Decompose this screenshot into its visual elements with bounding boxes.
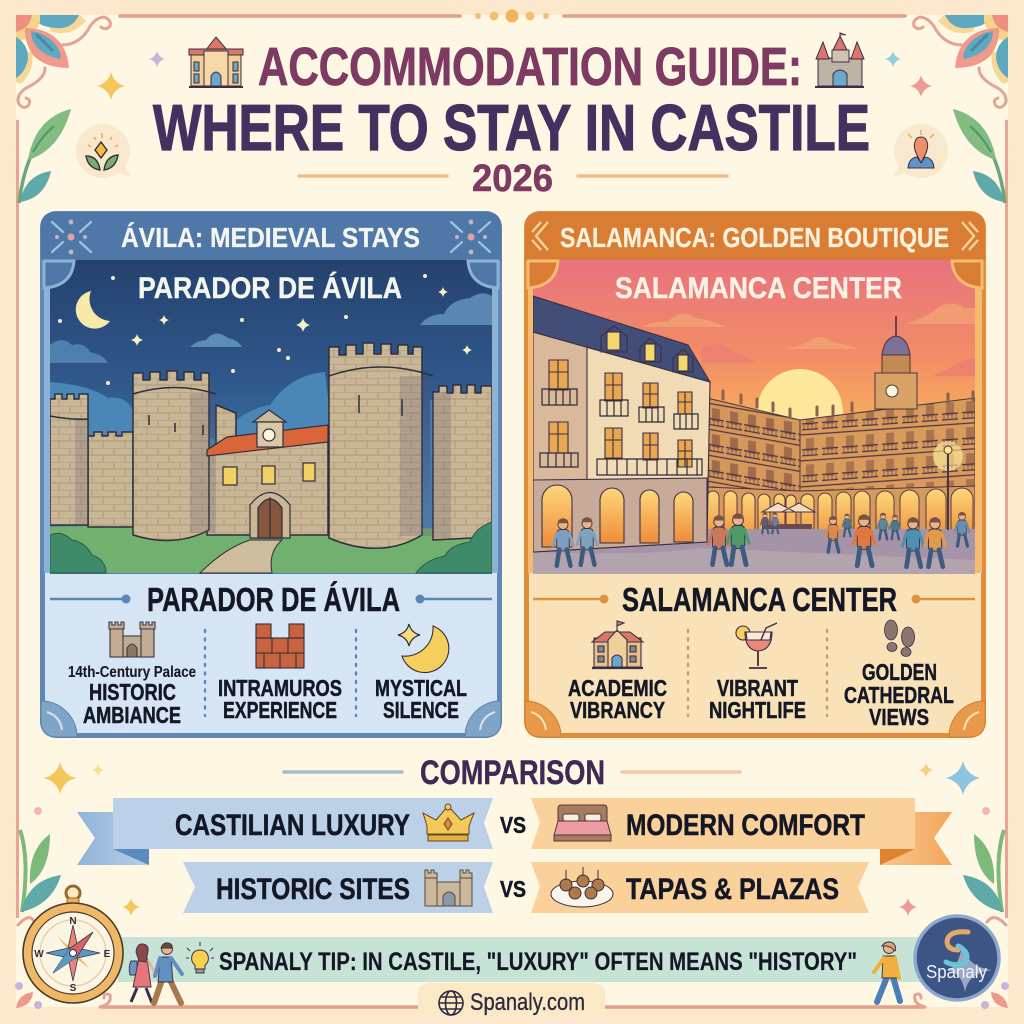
- title icon: hotel building: [189, 37, 243, 87]
- balconies: [540, 389, 702, 475]
- icon: cocktail: [736, 623, 777, 668]
- corner ornament: top left flower: [16, 15, 110, 107]
- dotted dividers: [205, 630, 356, 716]
- feature: intramuros experience: INTRAMUROS: [218, 675, 342, 701]
- vs label 2: VS: [500, 876, 526, 902]
- icon: crown: [423, 804, 474, 841]
- leaves: lower right: [963, 830, 1004, 912]
- feature: historic ambiance: HISTORIC: [89, 679, 176, 705]
- feature: vibrant nightlife: VIBRANT: [717, 675, 798, 701]
- panel: salamanca: [524, 211, 986, 738]
- image corner ornaments: avila: [44, 261, 498, 288]
- ribbon row 1 left: castilian luxury: CASTILIAN LUXURY: [175, 809, 410, 842]
- walkers: couple: [129, 943, 182, 1003]
- icon: footprints: [884, 620, 914, 656]
- feature: historic ambiance: 14th-Century Palace: [68, 664, 196, 681]
- ribbon row 2 right: tapas and plazas: [531, 862, 869, 913]
- feature: golden cathedral views: [844, 620, 954, 730]
- ribbon row 2 right: tapas and plazas: TAPAS & PLAZAS: [626, 873, 839, 906]
- people: [553, 512, 969, 567]
- roofline statues: [723, 391, 973, 417]
- panel: avila: [40, 211, 502, 738]
- title icon: castle: [815, 33, 864, 87]
- feature: mystical silence: SILENCE: [383, 697, 459, 723]
- compass: S: [70, 983, 77, 994]
- feature: academic vibrancy: ACADEMIC: [568, 675, 667, 701]
- path: [200, 540, 282, 573]
- feature: golden cathedral views: VIEWS: [869, 704, 929, 730]
- logo: spanaly: Spanaly: [926, 962, 987, 982]
- ribbon row 1 right: modern comfort: MODERN COMFORT: [626, 809, 865, 842]
- year rules: [299, 174, 727, 178]
- corner ornaments: avila lower: [41, 701, 501, 737]
- ribbon row 1 left: castilian luxury: [77, 798, 493, 865]
- leaves: lower left: [20, 830, 61, 912]
- feature: intramuros experience: [218, 624, 342, 723]
- sun: [757, 369, 843, 420]
- tip banner: SPANALY TIP: IN CASTILE, "LUXURY" OFTEN MEANS "HISTORY": [219, 948, 857, 976]
- feature: academic vibrancy: VIBRANCY: [570, 697, 665, 723]
- feature: historic ambiance: [68, 622, 196, 728]
- ground: [539, 529, 975, 560]
- speech bubble icon: lotus: [76, 124, 131, 178]
- lower title: salamanca: SALAMANCA CENTER: [622, 581, 897, 618]
- tower shading: [75, 376, 451, 538]
- icon: castle: [109, 622, 155, 657]
- feature: golden cathedral views: CATHEDRAL: [844, 682, 954, 708]
- image title: salamanca: SALAMANCA CENTER: [615, 272, 902, 305]
- icon: school: [592, 621, 643, 668]
- feature: vibrant nightlife: [709, 623, 806, 723]
- feature: golden cathedral views: GOLDEN: [862, 659, 937, 685]
- ribbon row 2 left: historic sites: [183, 862, 493, 913]
- illustration: avila night scene: [50, 260, 492, 574]
- logo: spanaly: [915, 916, 999, 1000]
- leaves: upper right: [953, 109, 1005, 203]
- icon: bed: [554, 805, 611, 841]
- header text: avila: ÁVILA: MEDIEVAL STAYS: [121, 222, 420, 253]
- walker: solo: [874, 942, 900, 1002]
- clouds: [643, 303, 975, 376]
- compass: [23, 886, 123, 1003]
- clouds: [50, 293, 492, 486]
- parador building details: [207, 410, 328, 538]
- feature: academic vibrancy: [568, 621, 667, 723]
- panel lower background: [45, 573, 497, 733]
- walls and towers: [50, 343, 492, 548]
- bushes: [50, 522, 492, 573]
- vs label 1: VS: [500, 812, 526, 838]
- plaza base band: [708, 486, 974, 529]
- icon: globe: [439, 991, 463, 1015]
- plaza walls: [708, 398, 800, 490]
- year: 2026: [472, 158, 553, 200]
- speech bubble icon: person: [893, 124, 948, 178]
- footer: website: [418, 983, 605, 1016]
- feature: mystical silence: [375, 624, 467, 723]
- lamp post: [933, 441, 963, 530]
- icon: tapas plate: [551, 867, 613, 907]
- lower title: avila: PARADOR DE ÁVILA: [147, 581, 400, 618]
- cafe umbrellas: [762, 503, 815, 529]
- moon and stars: [58, 274, 472, 385]
- ground: [50, 525, 492, 573]
- arcades: [708, 488, 974, 529]
- title: accommodation guide: ACCOMMODATION GUIDE:: [258, 37, 802, 97]
- icon: brick wall: [256, 624, 304, 668]
- panel lower background: [529, 573, 981, 733]
- icon: castle: [425, 870, 472, 906]
- comparison heading: COMPARISON: [420, 754, 605, 792]
- compass: W: [34, 949, 44, 960]
- sparkles: [34, 51, 990, 916]
- tip banner: [118, 937, 922, 982]
- icon: lightbulb: [186, 942, 214, 973]
- image corner ornaments: salamanca: [528, 261, 982, 288]
- footer: website: Spanaly.com: [470, 989, 585, 1016]
- header ornaments: avila: [52, 220, 490, 254]
- feature: vibrant nightlife: NIGHTLIFE: [709, 697, 806, 723]
- leaves: upper left: [19, 109, 71, 203]
- icon: moon and star: [398, 624, 449, 673]
- hotel windows: [542, 326, 693, 547]
- feature: mystical silence: MYSTICAL: [375, 675, 467, 701]
- header text: salamanca: SALAMANCA: GOLDEN BOUTIQUE: [560, 222, 949, 253]
- clock tower: [875, 316, 917, 409]
- ribbon row 2 left: historic sites: HISTORIC SITES: [216, 873, 410, 906]
- illustration: salamanca sunset scene: [533, 260, 975, 574]
- corner ornament: top right flower: [914, 15, 1008, 107]
- header ornaments: salamanca: [532, 222, 978, 250]
- image title: avila: PARADOR DE ÁVILA: [138, 271, 402, 305]
- feature: intramuros experience: EXPERIENCE: [223, 697, 337, 723]
- dotted dividers: [688, 630, 827, 716]
- compass: N: [69, 916, 77, 927]
- compass: E: [104, 949, 111, 960]
- ribbon row 1 right: modern comfort: [531, 798, 952, 865]
- hotel building: [533, 296, 710, 552]
- corner ornaments: salamanca lower: [525, 701, 985, 737]
- feature: historic ambiance: AMBIANCE: [83, 702, 181, 728]
